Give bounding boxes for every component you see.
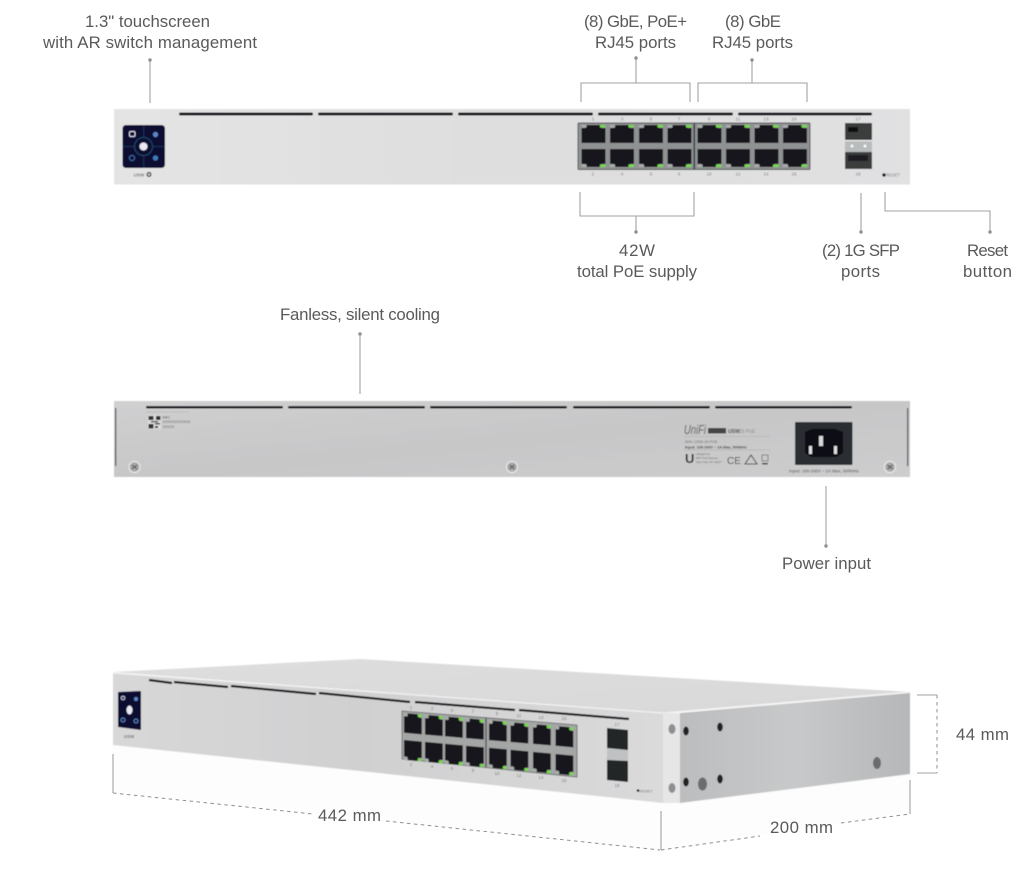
product label: U — [685, 451, 694, 466]
faint reflection — [113, 745, 910, 850]
callout: touchscreen: 1.3" touchscreen — [85, 12, 210, 31]
callout: fanless cooling: Fanless, silent cooling — [280, 305, 440, 324]
USW logo label — [134, 172, 151, 178]
callout: reset button: button — [963, 262, 1012, 281]
port numbers: 8 — [678, 172, 681, 176]
callout: SFP ports: (2) 1G SFP — [822, 241, 900, 260]
port numbers: 14 — [763, 172, 769, 176]
product label: 685 Third Avenue — [696, 456, 718, 460]
port numbers: 4 — [431, 764, 434, 769]
reset: RESET — [639, 788, 653, 794]
port numbers: 8 — [472, 768, 475, 773]
rear vent slots — [146, 406, 852, 408]
port numbers: 16 — [791, 172, 797, 176]
RJ45 port block — [578, 123, 810, 170]
dimension: 442 mm — [113, 754, 660, 850]
top surface — [113, 659, 910, 713]
callout: GbE ports: RJ45 ports — [712, 33, 793, 52]
port numbers: 6 — [451, 766, 454, 771]
port numbers: 1 — [592, 116, 595, 122]
port numbers: 17 — [614, 722, 620, 727]
dimension: 200 mm — [661, 780, 910, 850]
product label: New York, NY 10017 — [696, 460, 722, 464]
port numbers: 17 — [855, 116, 861, 122]
dimension: 200 mm: 200 mm — [770, 818, 833, 837]
icon: touchscreen — [122, 125, 165, 168]
port numbers: 3 — [431, 706, 434, 711]
port numbers: 15 — [791, 116, 797, 122]
callout: GbE ports: (8) GbE — [725, 12, 781, 31]
callout: SFP ports — [822, 193, 900, 281]
port numbers: 9 — [708, 116, 711, 122]
callout: power input: Power input — [782, 554, 871, 573]
product label: Input: 100-240V ~ 2A Max, 50/60Hz — [685, 446, 747, 450]
QR label: MAC — [162, 416, 171, 420]
front face — [113, 673, 663, 803]
QR label — [146, 412, 191, 429]
switch rear body — [114, 401, 910, 477]
port numbers: 18 — [855, 172, 861, 176]
callout: reset button: Reset — [967, 241, 1008, 260]
SFP ports — [845, 123, 872, 169]
port numbers: 9 — [496, 711, 499, 716]
dimension: 44 mm — [917, 695, 1009, 773]
switch front body — [114, 109, 910, 184]
panel: rear view of switch — [114, 401, 910, 477]
port numbers: 5 — [451, 708, 454, 713]
port numbers: 14 — [538, 775, 544, 780]
port numbers: 13 — [763, 116, 769, 122]
port numbers: 12 — [516, 773, 522, 778]
product label: M/N: USW-16-POE — [685, 440, 718, 444]
callout: PoE supply: total PoE supply — [577, 262, 698, 281]
port numbers: 10 — [706, 172, 712, 176]
SFP ports — [607, 728, 628, 782]
ear screws and side holes — [668, 722, 881, 793]
input rating text: Input: 100-240V ~ 2A Max, 50/60Hz — [789, 468, 859, 474]
port numbers — [592, 116, 861, 176]
callout: reset button — [885, 192, 1012, 281]
port numbers: 6 — [650, 172, 653, 176]
port numbers — [410, 705, 620, 788]
callout: PoE supply — [577, 192, 698, 281]
port numbers: 7 — [472, 709, 475, 714]
port numbers: 10 — [494, 771, 500, 776]
port numbers: 13 — [538, 715, 544, 720]
touchscreen — [118, 691, 141, 730]
QR label: XXXXX — [162, 425, 175, 429]
port numbers: 11 — [517, 713, 522, 718]
callout: power input — [782, 486, 871, 573]
side edge marks — [115, 408, 908, 466]
QR label: XXXXXXXXXXXX — [162, 420, 191, 424]
product label: UniFi — [684, 422, 707, 437]
vent slots — [149, 680, 629, 719]
reset button: RESET — [886, 172, 900, 178]
port numbers: 1 — [410, 705, 413, 710]
rear screws — [129, 462, 896, 472]
port numbers: 5 — [650, 116, 653, 122]
port numbers: 2 — [410, 762, 413, 767]
callout: touchscreen: with AR switch management — [42, 33, 257, 52]
callout: PoE supply: 42W — [619, 241, 655, 260]
port numbers: 11 — [736, 116, 741, 122]
power socket — [795, 422, 852, 465]
port numbers: 3 — [621, 116, 624, 122]
port numbers: 4 — [621, 172, 624, 176]
port numbers: 7 — [678, 116, 681, 122]
RJ45 ports — [402, 711, 577, 777]
callout: touchscreen — [42, 12, 257, 103]
port numbers: 2 — [592, 172, 595, 176]
port numbers: 16 — [561, 778, 567, 783]
callout: GbE ports — [698, 12, 807, 102]
port numbers: 15 — [561, 716, 567, 721]
dimension: 44 mm: 44 mm — [956, 725, 1009, 744]
callout: PoE+ ports: RJ45 ports — [595, 33, 676, 52]
product label: Ubiquiti Inc. — [696, 452, 711, 456]
product label: CE — [727, 456, 741, 467]
callout: SFP ports: ports — [841, 262, 880, 281]
product label: 16 PoE — [739, 429, 756, 435]
panel: perspective view of switch — [113, 659, 910, 850]
top vent slots — [179, 112, 872, 116]
USW label: USW — [124, 734, 135, 739]
port numbers: 12 — [735, 172, 741, 176]
product label: USW — [728, 429, 740, 435]
port numbers: 18 — [614, 783, 620, 788]
USW logo label: USW — [134, 172, 145, 178]
side face — [680, 693, 910, 803]
mounting ear — [663, 713, 680, 803]
panel: front view of switch — [114, 109, 910, 184]
product label — [684, 422, 770, 467]
callout: fanless cooling — [280, 305, 440, 394]
callout: PoE+ ports: (8) GbE, PoE+ — [584, 12, 687, 31]
dimension: 442 mm: 442 mm — [318, 806, 381, 825]
callout: PoE+ ports — [581, 12, 690, 102]
